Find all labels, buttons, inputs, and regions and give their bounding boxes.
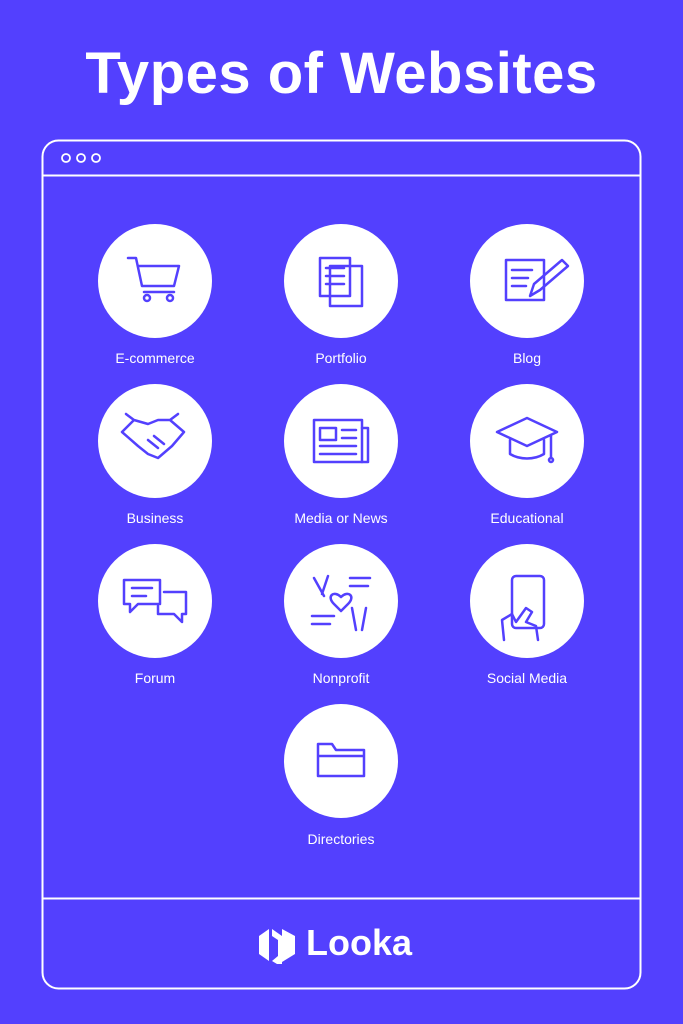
handshake xyxy=(122,414,184,458)
portfolio xyxy=(320,258,350,296)
labels: E-commerce xyxy=(115,350,195,366)
logo: Looka xyxy=(306,922,412,963)
text: Directories xyxy=(308,831,374,847)
phone hand xyxy=(512,576,544,628)
forum xyxy=(124,580,186,622)
cap xyxy=(497,418,557,458)
blog xyxy=(506,260,544,300)
text: Portfolio xyxy=(315,350,367,366)
text: Nonprofit xyxy=(313,670,369,686)
text: Forum xyxy=(135,670,175,686)
nonprofit hands xyxy=(331,594,351,611)
title: Types of Websites xyxy=(85,41,598,106)
folder xyxy=(318,744,364,776)
text: Blog xyxy=(513,350,541,366)
cart xyxy=(128,258,179,292)
text: Educational xyxy=(490,510,564,526)
text: Media or News xyxy=(294,510,388,526)
news xyxy=(314,420,362,462)
text: Social Media xyxy=(487,670,567,686)
text: Business xyxy=(127,510,183,526)
logo xyxy=(259,922,412,964)
